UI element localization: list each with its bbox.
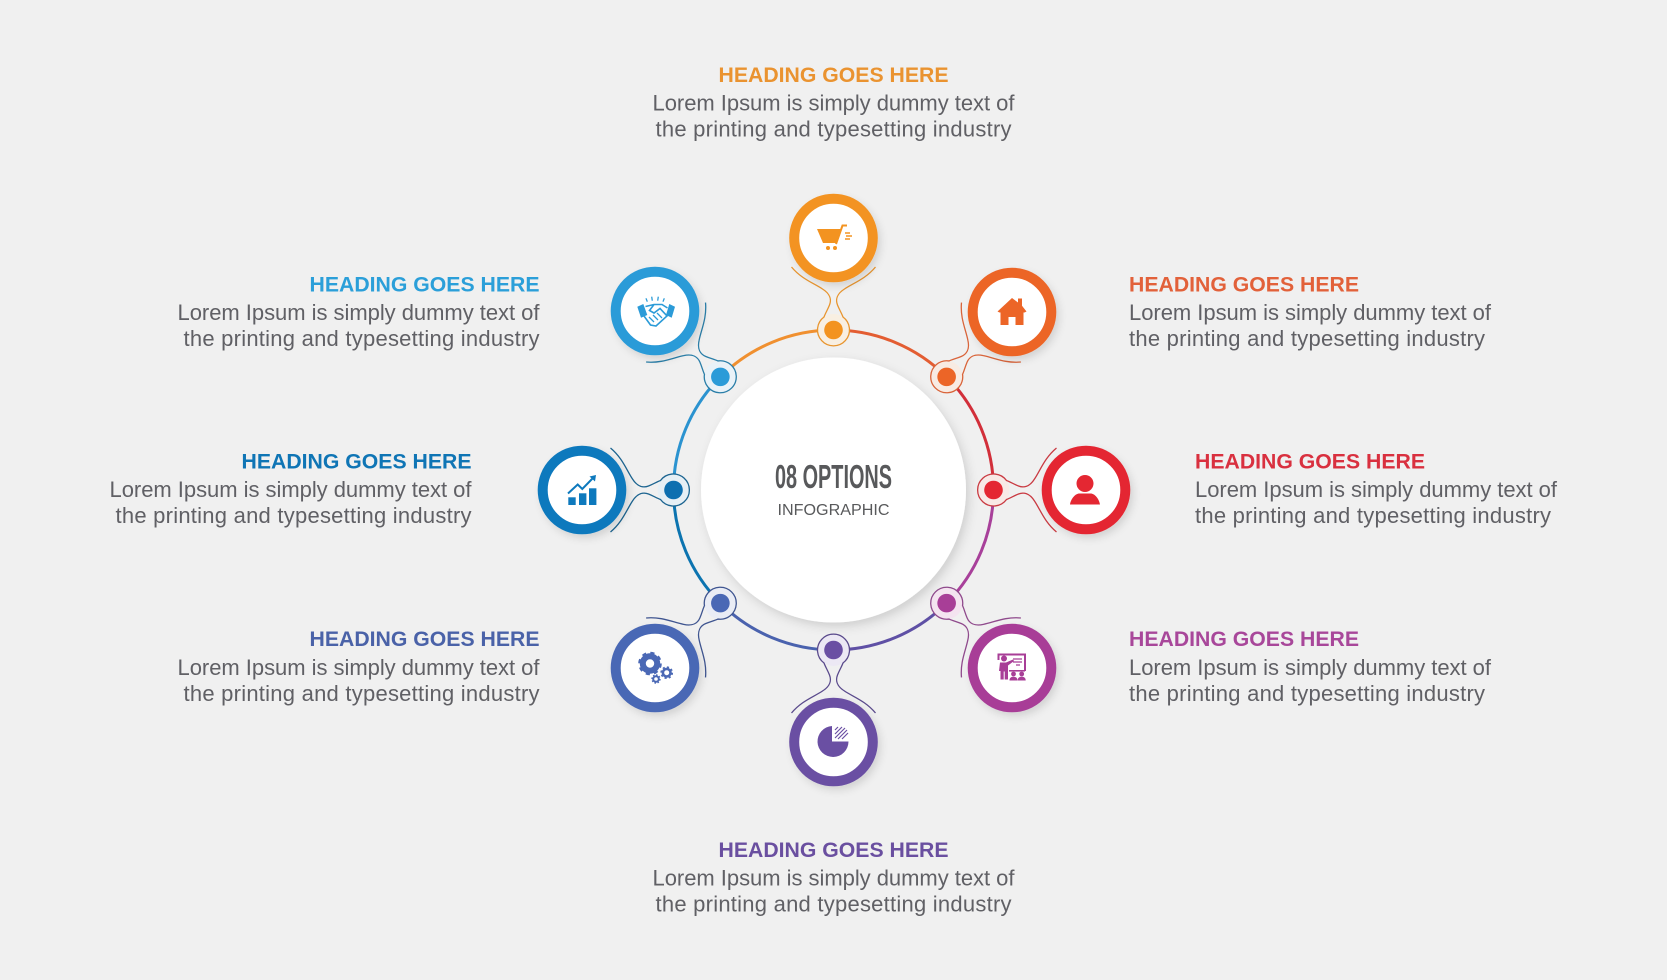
- text 3: Lorem Ipsum is simply dummy text of: [1195, 477, 1558, 502]
- heading 2: HEADING GOES HERE: [1129, 272, 1359, 296]
- text 5: the printing and typesetting industry: [656, 892, 1012, 916]
- text 4: the printing and typesetting industry: [1129, 681, 1485, 706]
- connector 5: [792, 634, 876, 713]
- connector 8: [646, 303, 761, 418]
- option 4: south-east, magenta: [906, 562, 1492, 707]
- connector 6: [646, 562, 761, 677]
- ring of coloured arcs: [674, 330, 994, 650]
- text 8: Lorem Ipsum is simply dummy text of: [178, 300, 540, 325]
- text 1: the printing and typesetting industry: [656, 116, 1012, 142]
- option 8: north-west, sky blue: [178, 272, 761, 418]
- text 6: Lorem Ipsum is simply dummy text of: [178, 655, 540, 680]
- connector 2: [906, 303, 1021, 418]
- text 6: the printing and typesetting industry: [184, 681, 540, 706]
- text 2: the printing and typesetting industry: [1129, 326, 1485, 351]
- text 4: Lorem Ipsum is simply dummy text of: [1129, 655, 1492, 680]
- heading 3: HEADING GOES HERE: [1195, 450, 1425, 474]
- connector 3: [978, 448, 1056, 532]
- text 5: Lorem Ipsum is simply dummy text of: [652, 866, 1015, 890]
- text 1: Lorem Ipsum is simply dummy text of: [652, 90, 1015, 116]
- connector 1: [792, 267, 876, 346]
- icon: pie chart: [794, 703, 873, 781]
- heading 4: HEADING GOES HERE: [1129, 627, 1359, 651]
- option 3: east, red: [978, 448, 1558, 532]
- heading 1: HEADING GOES HERE: [718, 63, 948, 87]
- text 8: the printing and typesetting industry: [184, 326, 540, 351]
- icon: growth chart: [543, 451, 621, 529]
- option 6: south-west, indigo: [178, 562, 761, 707]
- heading 6: HEADING GOES HERE: [310, 627, 540, 651]
- icon: handshake: [616, 272, 694, 350]
- icon: gears: [616, 629, 694, 707]
- icon: person: [1047, 451, 1125, 529]
- heading 5: HEADING GOES HERE: [718, 838, 948, 862]
- centre title: 08 OPTIONS: [775, 458, 892, 495]
- connector 4: [906, 562, 1021, 677]
- icon: house: [973, 273, 1051, 351]
- icon: shopping cart: [794, 199, 873, 277]
- centre circle: [701, 358, 966, 622]
- option 1: top, orange: [652, 63, 1015, 346]
- text 7: Lorem Ipsum is simply dummy text of: [110, 477, 472, 502]
- text 3: the printing and typesetting industry: [1195, 503, 1551, 528]
- heading 8: HEADING GOES HERE: [310, 272, 540, 296]
- option 7: west, deep blue: [110, 448, 690, 532]
- option 2: north-east, orange-red: [906, 272, 1492, 418]
- option 5: south, purple: [652, 634, 1015, 916]
- heading 7: HEADING GOES HERE: [242, 450, 472, 474]
- centre subtitle: INFOGRAPHIC: [778, 502, 890, 519]
- icon: teacher at board: [973, 629, 1051, 707]
- connector 7: [610, 448, 690, 532]
- text 7: the printing and typesetting industry: [116, 503, 472, 528]
- text 2: Lorem Ipsum is simply dummy text of: [1129, 300, 1492, 325]
